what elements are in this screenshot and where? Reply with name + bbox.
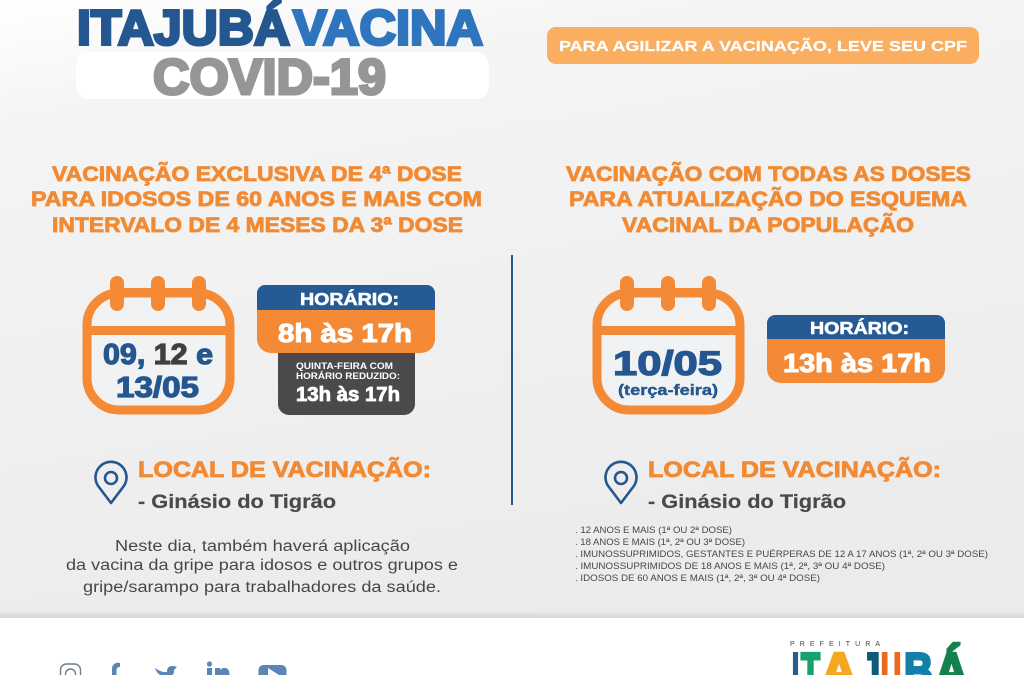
location: right column: LOCAL DE VACINAÇÃO: — [648, 457, 941, 482]
schedule: 8h às 17h with reduced Thursday hours: 8h às 17h — [278, 318, 412, 348]
icon: calendar 10/05: (terça-feira) — [618, 382, 718, 399]
heading: right column: VACINAÇÃO COM TODAS AS DOSES — [566, 163, 971, 186]
schedule: 13h às 17h — [767, 315, 945, 383]
heading: right column: VACINAL DA POPULAÇÃO — [622, 214, 914, 237]
heading: right column — [566, 163, 971, 237]
icon: location pin right — [605, 462, 636, 503]
schedule: 8h às 17h with reduced Thursday hours: QUINTA-FEIRA COM — [296, 361, 393, 372]
text block: eligible groups list: . 12 ANOS E MAIS (1ª OU 2ª DOSE) — [575, 525, 732, 536]
icon: twitter — [155, 666, 177, 675]
logo: Prefeitura Itajubá — [790, 641, 968, 675]
heading: right column: PARA ATUALIZAÇÃO DO ESQUEMA — [569, 188, 967, 211]
heading: left column: VACINAÇÃO EXCLUSIVA DE 4ª DOSE — [52, 163, 462, 186]
icon: calendar 09, 12 e 13/05: 09, 12 e — [103, 339, 213, 371]
callout: leve seu CPF: PARA AGILIZAR A VACINAÇÃO, LEVE SEU CPF — [559, 37, 967, 55]
icon: calendar 10/05 — [595, 276, 743, 410]
icon: youtube — [258, 665, 286, 675]
text block: flu and measles note: gripe/sarampo para trabalhadores da saúde. — [83, 579, 441, 596]
location: left column: - Ginásio do Tigrão — [138, 491, 336, 513]
heading: left column — [31, 163, 482, 237]
text block: eligible groups list: . IDOSOS DE 60 ANOS E MAIS (1ª, 2ª, 3ª OU 4ª DOSE) — [575, 573, 820, 584]
location: right column: - Ginásio do Tigrão — [648, 491, 846, 513]
text block: flu and measles note: Neste dia, também haverá aplicação — [115, 538, 410, 555]
icon: linkedin — [207, 661, 230, 675]
text block: eligible groups list: . IMUNOSSUPRIMIDOS, GESTANTES E PUÉRPERAS DE 12 A 17 ANOS (1ª, 2ª OU 3ª DOSE) — [575, 549, 988, 560]
icon: location pin left — [95, 462, 126, 503]
title: Itajubá Vacina COVID-19: COVID-19 — [153, 49, 386, 105]
icon: calendar 10/05: 10/05 — [613, 345, 722, 383]
footer panel — [0, 618, 1024, 675]
logo: Prefeitura Itajubá: PREFEITURA — [790, 641, 880, 648]
icon: instagram — [60, 664, 80, 675]
location: right column — [648, 457, 941, 513]
text block: eligible groups list: . 18 ANOS E MAIS (1ª, 2ª OU 3ª DOSE) — [575, 537, 745, 548]
text block: flu and measles note — [66, 538, 458, 596]
title: Itajubá Vacina COVID-19 — [76, 2, 489, 105]
callout: leve seu CPF — [547, 27, 979, 64]
schedule: 8h às 17h with reduced Thursday hours — [257, 285, 435, 415]
heading: left column: PARA IDOSOS DE 60 ANOS E MAIS COM — [31, 188, 482, 211]
text block: flu and measles note: da vacina da gripe para idosos e outros grupos e — [66, 557, 458, 574]
schedule: 13h às 17h: 13h às 17h — [783, 348, 931, 378]
icon: calendar 09, 12 e 13/05: 13/05 — [116, 372, 199, 404]
schedule: 8h às 17h with reduced Thursday hours: HORÁRIO: — [300, 288, 399, 309]
text block: eligible groups list: . IMUNOSSUPRIMIDOS DE 18 ANOS E MAIS (1ª, 2ª, 3ª OU 4ª DOSE) — [575, 561, 885, 572]
schedule: 13h às 17h: HORÁRIO: — [810, 317, 909, 338]
title: Itajubá Vacina COVID-19: ITAJUBÁ — [77, 2, 290, 56]
schedule: 8h às 17h with reduced Thursday hours: 13h às 17h — [296, 384, 400, 406]
heading: left column: INTERVALO DE 4 MESES DA 3ª DOSE — [52, 214, 463, 237]
icon: facebook — [112, 663, 120, 675]
location: left column — [138, 457, 431, 513]
location: left column: LOCAL DE VACINAÇÃO: — [138, 457, 431, 482]
text block: eligible groups list — [575, 525, 988, 584]
title: Itajubá Vacina COVID-19: VACINA — [293, 2, 483, 56]
schedule: 8h às 17h with reduced Thursday hours: HORÁRIO REDUZIDO: — [296, 371, 400, 382]
icon: calendar 09, 12 e 13/05 — [85, 276, 233, 410]
